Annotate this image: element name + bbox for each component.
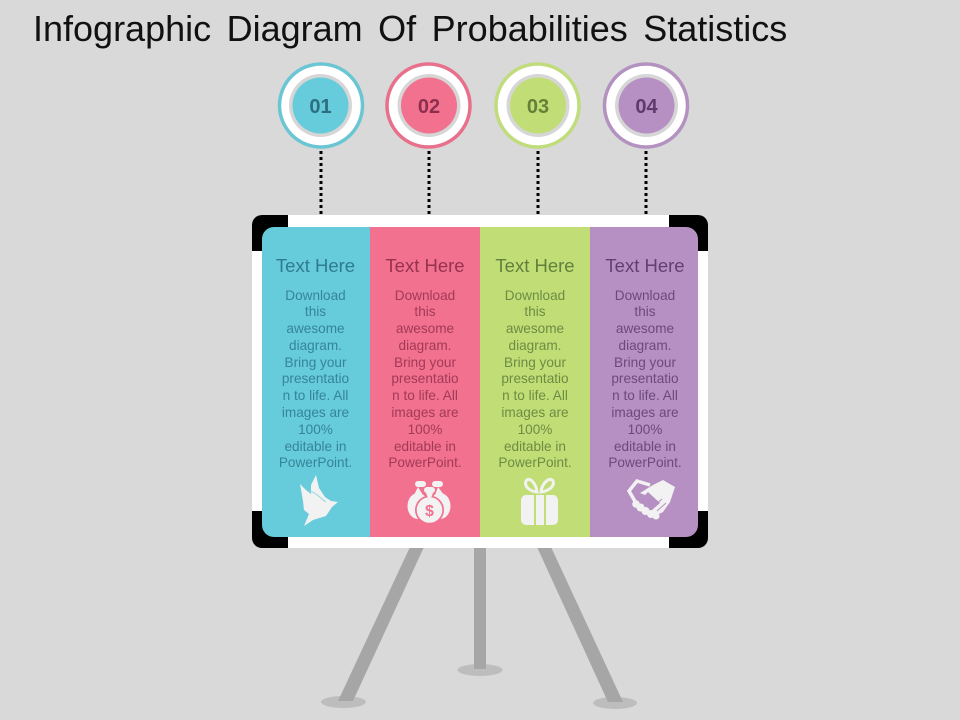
column 1 body: diagram. bbox=[289, 338, 342, 353]
column 4 body: 100% bbox=[628, 422, 662, 437]
badge 03: 03 bbox=[527, 96, 549, 118]
icon: dove bbox=[300, 475, 338, 526]
column 3 body: n to life. All bbox=[502, 388, 568, 403]
column 3 body: this bbox=[524, 304, 546, 319]
icon: gift box bbox=[521, 479, 558, 525]
column 4 body: Download bbox=[615, 288, 675, 302]
column 3 body: Download bbox=[505, 288, 565, 302]
column 3 body: editable in bbox=[504, 439, 566, 454]
badge 02 bbox=[387, 64, 470, 147]
dotted connectors bbox=[321, 151, 646, 214]
column 4 body: n to life. All bbox=[612, 388, 678, 403]
column 2 body: presentatio bbox=[391, 371, 459, 386]
board frame bbox=[252, 215, 708, 548]
column 4 body: awesome bbox=[616, 321, 674, 336]
badge 04: 04 bbox=[635, 96, 658, 118]
icon: handshake bbox=[629, 480, 675, 520]
panel: column 3 text bbox=[495, 255, 575, 470]
column 2 heading: Text Here bbox=[385, 255, 465, 276]
column 3 body bbox=[498, 288, 572, 470]
column 4 body: this bbox=[634, 304, 656, 319]
panel: column 2 text bbox=[385, 255, 465, 470]
column 3 body: images are bbox=[501, 405, 569, 420]
column 2 body: editable in bbox=[394, 439, 456, 454]
column 1 body: presentatio bbox=[282, 371, 349, 386]
icon: money bags: $ bbox=[425, 503, 434, 520]
badge 01 bbox=[280, 64, 362, 147]
title: Infographic Diagram Of Probabilities Statistics bbox=[33, 8, 787, 49]
column 2 body: awesome bbox=[396, 321, 454, 336]
column 2 body bbox=[388, 288, 462, 470]
column 1 body: editable in bbox=[284, 439, 346, 454]
column 1 body bbox=[279, 288, 352, 470]
column 1 body: awesome bbox=[286, 321, 345, 336]
column 1 body: PowerPoint. bbox=[279, 455, 352, 470]
column 4 body bbox=[608, 288, 682, 470]
column 3 heading: Text Here bbox=[495, 255, 575, 276]
column 3 body: PowerPoint. bbox=[498, 455, 572, 470]
column 2 body: 100% bbox=[408, 422, 442, 437]
colour panel backgrounds bbox=[262, 227, 698, 537]
column 3 body: diagram. bbox=[509, 338, 561, 353]
column 3 body: awesome bbox=[506, 321, 564, 336]
column 1 body: images are bbox=[282, 405, 349, 420]
column 4 body: presentatio bbox=[611, 371, 679, 386]
column 2 body: n to life. All bbox=[392, 388, 458, 403]
column 2 body: Download bbox=[395, 288, 455, 302]
column 1 body: this bbox=[305, 304, 326, 319]
easel legs bbox=[321, 547, 637, 709]
column 2 body: this bbox=[414, 304, 436, 319]
column 3 body: Bring your bbox=[504, 355, 566, 370]
icon: money bags bbox=[408, 481, 450, 524]
column 4 heading: Text Here bbox=[605, 255, 685, 276]
column 2 body: Bring your bbox=[394, 355, 456, 370]
badge 04 bbox=[604, 64, 688, 147]
badge 03 bbox=[496, 64, 579, 147]
column 4 body: editable in bbox=[614, 439, 676, 454]
column 2 body: diagram. bbox=[399, 338, 451, 353]
column 2 body: images are bbox=[391, 405, 459, 420]
panel: column 4 text bbox=[605, 255, 685, 470]
column 4 body: images are bbox=[611, 405, 679, 420]
column 1 heading: Text Here bbox=[276, 255, 355, 276]
column 1 body: n to life. All bbox=[283, 388, 348, 403]
badge 02: 02 bbox=[418, 96, 440, 118]
panel: column 1 text bbox=[276, 255, 355, 470]
column 3 body: presentatio bbox=[501, 371, 569, 386]
column 4 body: PowerPoint. bbox=[608, 455, 682, 470]
column 4 body: Bring your bbox=[614, 355, 676, 370]
column 4 body: diagram. bbox=[619, 338, 671, 353]
column 1 body: Download bbox=[285, 288, 346, 302]
column 1 body: 100% bbox=[298, 422, 333, 437]
column 1 body: Bring your bbox=[285, 355, 346, 370]
column 2 body: PowerPoint. bbox=[388, 455, 462, 470]
badge 01: 01 bbox=[309, 96, 332, 118]
column 3 body: 100% bbox=[518, 422, 552, 437]
